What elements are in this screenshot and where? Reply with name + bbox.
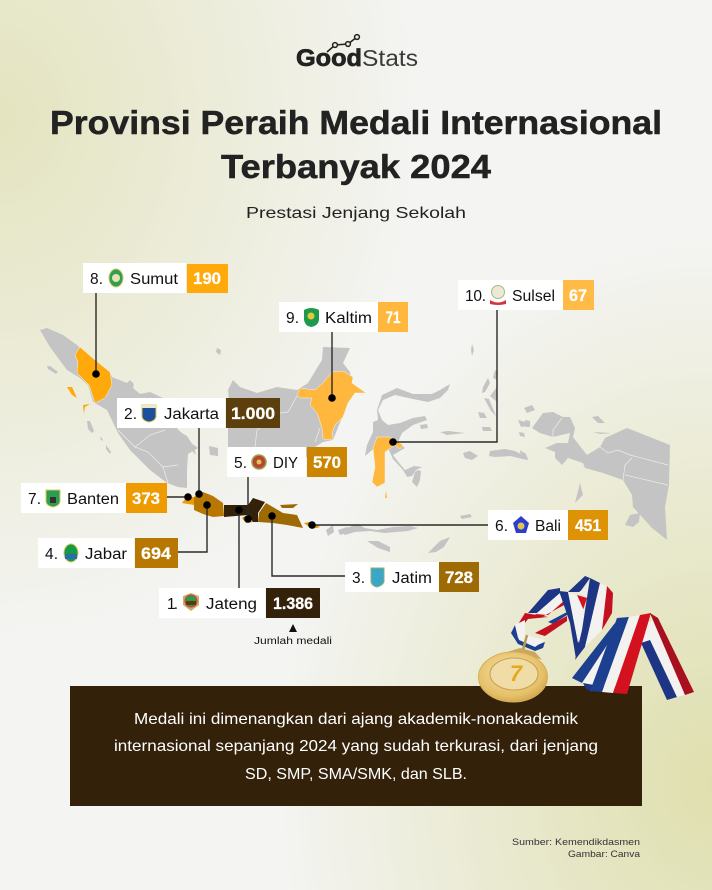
label: 10 Sulsel 67: Sulsel [512,288,555,305]
legend: jumlah medali [254,624,332,647]
highlighted: Sumut [75,347,112,403]
info banner: SD, SMP, SMA/SMK, dan SLB. [245,766,467,783]
label: 7 Banten 373 [21,483,167,513]
Sumatra [40,328,198,488]
title: Provinsi Peraih Medali Internasional [50,104,662,141]
medal disc [478,652,548,702]
legend: jumlah medali: Jumlah medali [254,636,332,647]
label: 5 DIY 570 [227,447,347,477]
label: 6 Bali 451: 6. [495,518,508,535]
label: 10 Sulsel 67: 10. [465,288,486,305]
label: 9 Kaltim 71 [279,302,408,332]
label: 1 Jateng 1.386 [159,588,320,618]
info banner: internasional sepanjang 2024 yang sudah terkurasi, dari jenjang [114,738,598,755]
ribbon: front band [590,617,629,692]
highlighted: Jatim [258,503,303,528]
label: 6 Bali 451: Bali [535,518,561,535]
label: 6 Bali 451 [488,510,608,540]
ribbon: middle fold [559,591,580,659]
Kalimantan [228,347,352,465]
highlighted: Bali [304,522,320,529]
label: 7 Banten 373: Banten [67,491,119,508]
connector lines [96,293,497,588]
logo: GoodStats [296,35,418,72]
highlighted: Kaltim [297,371,366,440]
label: 3 Jatim 728: 728 [445,569,473,587]
label: 8 Sumut 190: 8. [90,271,103,288]
highlighted: Sulsel [372,437,403,487]
source credits: Sumber: Kemendikdasmen [512,837,640,848]
label: 4 Jabar 694 [38,538,178,568]
label: 8 Sumut 190: 190 [193,270,221,288]
label: 10 Sulsel 67 [458,280,594,310]
label: 4 Jabar 694: Jabar [85,546,127,563]
ribbon: back band [572,623,617,683]
label: 4 Jabar 694: 694 [141,545,172,563]
source credits [512,837,641,860]
ribbon: left loop [548,612,567,624]
label: 5 DIY 570: 570 [313,454,341,472]
Lesser Sunda [326,514,472,553]
label: 3 Jatim 728: Jatim [392,570,432,587]
label: 9 Kaltim 71: 71 [386,309,400,327]
subtitle: Prestasi Jenjang Sekolah [246,205,466,222]
logo: GoodStats: Stats [362,45,418,71]
label: 1 Jateng 1.386: 1.386 [273,595,313,613]
highlighted: DIY [242,516,253,523]
ribbon: tail [641,630,677,700]
label: 6 Bali 451: 451 [575,517,601,535]
label: 3 Jatim 728: 3. [352,570,365,587]
label: 8 Sumut 190: Sumut [130,271,179,288]
label: 10 Sulsel 67: 67 [569,287,587,305]
info banner [70,686,642,806]
Sumatra islands [47,348,221,456]
label: 2 Jakarta 1.000: 2. [124,406,137,423]
label: 5 DIY 570: 5. [234,455,247,472]
ribbon: top back fold [568,576,590,592]
label: 2 Jakarta 1.000: Jakarta [164,406,219,423]
label: 8 Sumut 190 [83,263,228,293]
highlighted: Jabar [194,492,224,517]
label: 7 Banten 373: 373 [132,490,160,508]
label: 2 Jakarta 1.000 [117,398,280,428]
label: 2 Jakarta 1.000: 1.000 [231,405,275,423]
Sumatra internal borders [118,430,178,483]
medal with ribbon: 7 [510,661,524,686]
medal with ribbon [478,576,694,702]
label: 3 Jatim 728 [345,562,479,592]
ribbon: upright band [575,578,600,660]
highlighted: Jateng [224,498,265,522]
label: 7 Banten 373: 7. [28,491,41,508]
highlighted: Banten [182,495,195,505]
label: 9 Kaltim 71: Kaltim [325,310,372,327]
title: Terbanyak 2024 [221,148,492,185]
source credits: Gambar: Canva [568,849,641,860]
map of Indonesia [40,328,670,553]
Maluku [440,344,535,460]
Sulawesi [365,384,450,477]
label: 1 Jateng 1.386: Jateng [206,596,257,613]
medal hanger [523,635,527,650]
info banner: Medali ini dimenangkan dari ajang akademik-nonakademik [134,711,579,728]
title [50,104,662,185]
logo: GoodStats: Good [296,45,362,72]
Papua [532,412,670,540]
label: 1 Jateng 1.386: 1. [167,596,178,613]
label: 9 Kaltim 71: 9. [286,310,299,327]
label: 5 DIY 570: DIY [273,455,298,472]
label: 4 Jabar 694: 4. [45,546,58,563]
map dots [92,370,397,529]
